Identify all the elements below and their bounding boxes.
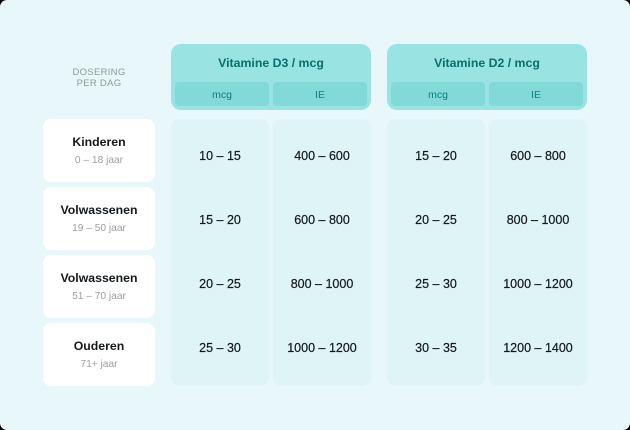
heading: dosering per dag [72,67,126,89]
row title: Volwassenen [60,203,138,217]
data column: D2 IE: 800 – 1000 [507,213,569,227]
column label: D3 IE: IE [315,89,325,101]
row age range: 0 – 18 jaar [75,155,123,166]
row label: volwassenen 51-70 [43,254,155,318]
column label: D3 mcg [175,82,269,106]
data column: D2 mcg: 30 – 35 [415,341,457,355]
header: vitamine D2 [387,44,587,110]
data column: D3 IE: 800 – 1000 [291,277,353,291]
row title: Ouderen [74,339,124,353]
column label: D3 IE [273,82,367,106]
data column: D2 mcg [387,118,485,386]
data column: D3 mcg: 25 – 30 [199,341,241,355]
row age range: 19 – 50 jaar [72,223,126,234]
row label: kinderen [43,118,155,182]
data column: D3 IE: 1000 – 1200 [287,341,357,355]
row age range: 71+ jaar [80,359,118,370]
column label: D2 mcg [391,82,485,106]
column label: D2 mcg: mcg [428,89,448,101]
heading: vitamine D2: Vitamine D2 / mcg [434,56,540,70]
data column: D3 IE [273,118,371,386]
column label: D2 IE: IE [531,89,541,101]
heading: dosering per dag: PER DAG [77,78,121,89]
data column: D3 mcg: 15 – 20 [199,213,241,227]
data column: D3 IE: 400 – 600 [294,149,350,163]
heading: dosering per dag: DOSERING [72,67,126,78]
data column: D2 IE: 1200 – 1400 [503,341,573,355]
data column: D3 IE: 600 – 800 [294,213,350,227]
header: vitamine D3 [171,44,371,110]
data column: D2 mcg: 25 – 30 [415,277,457,291]
heading: vitamine D3: Vitamine D3 / mcg [218,56,324,70]
data column: D3 mcg: 20 – 25 [199,277,241,291]
row title: Volwassenen [60,271,138,285]
data column: D2 IE [489,118,587,386]
row label: ouderen [43,322,155,386]
data column: D2 IE: 600 – 800 [510,149,566,163]
row label: volwassenen 19-50 [43,186,155,250]
data column: D3 mcg [171,118,269,386]
column label: D2 IE [489,82,583,106]
row age range: 51 – 70 jaar [72,291,126,302]
data column: D2 IE: 1000 – 1200 [503,277,573,291]
row title: Kinderen [72,135,126,149]
data column: D2 mcg: 20 – 25 [415,213,457,227]
data column: D3 mcg: 10 – 15 [199,149,241,163]
column label: D3 mcg: mcg [212,89,232,101]
data column: D2 mcg: 15 – 20 [415,149,457,163]
